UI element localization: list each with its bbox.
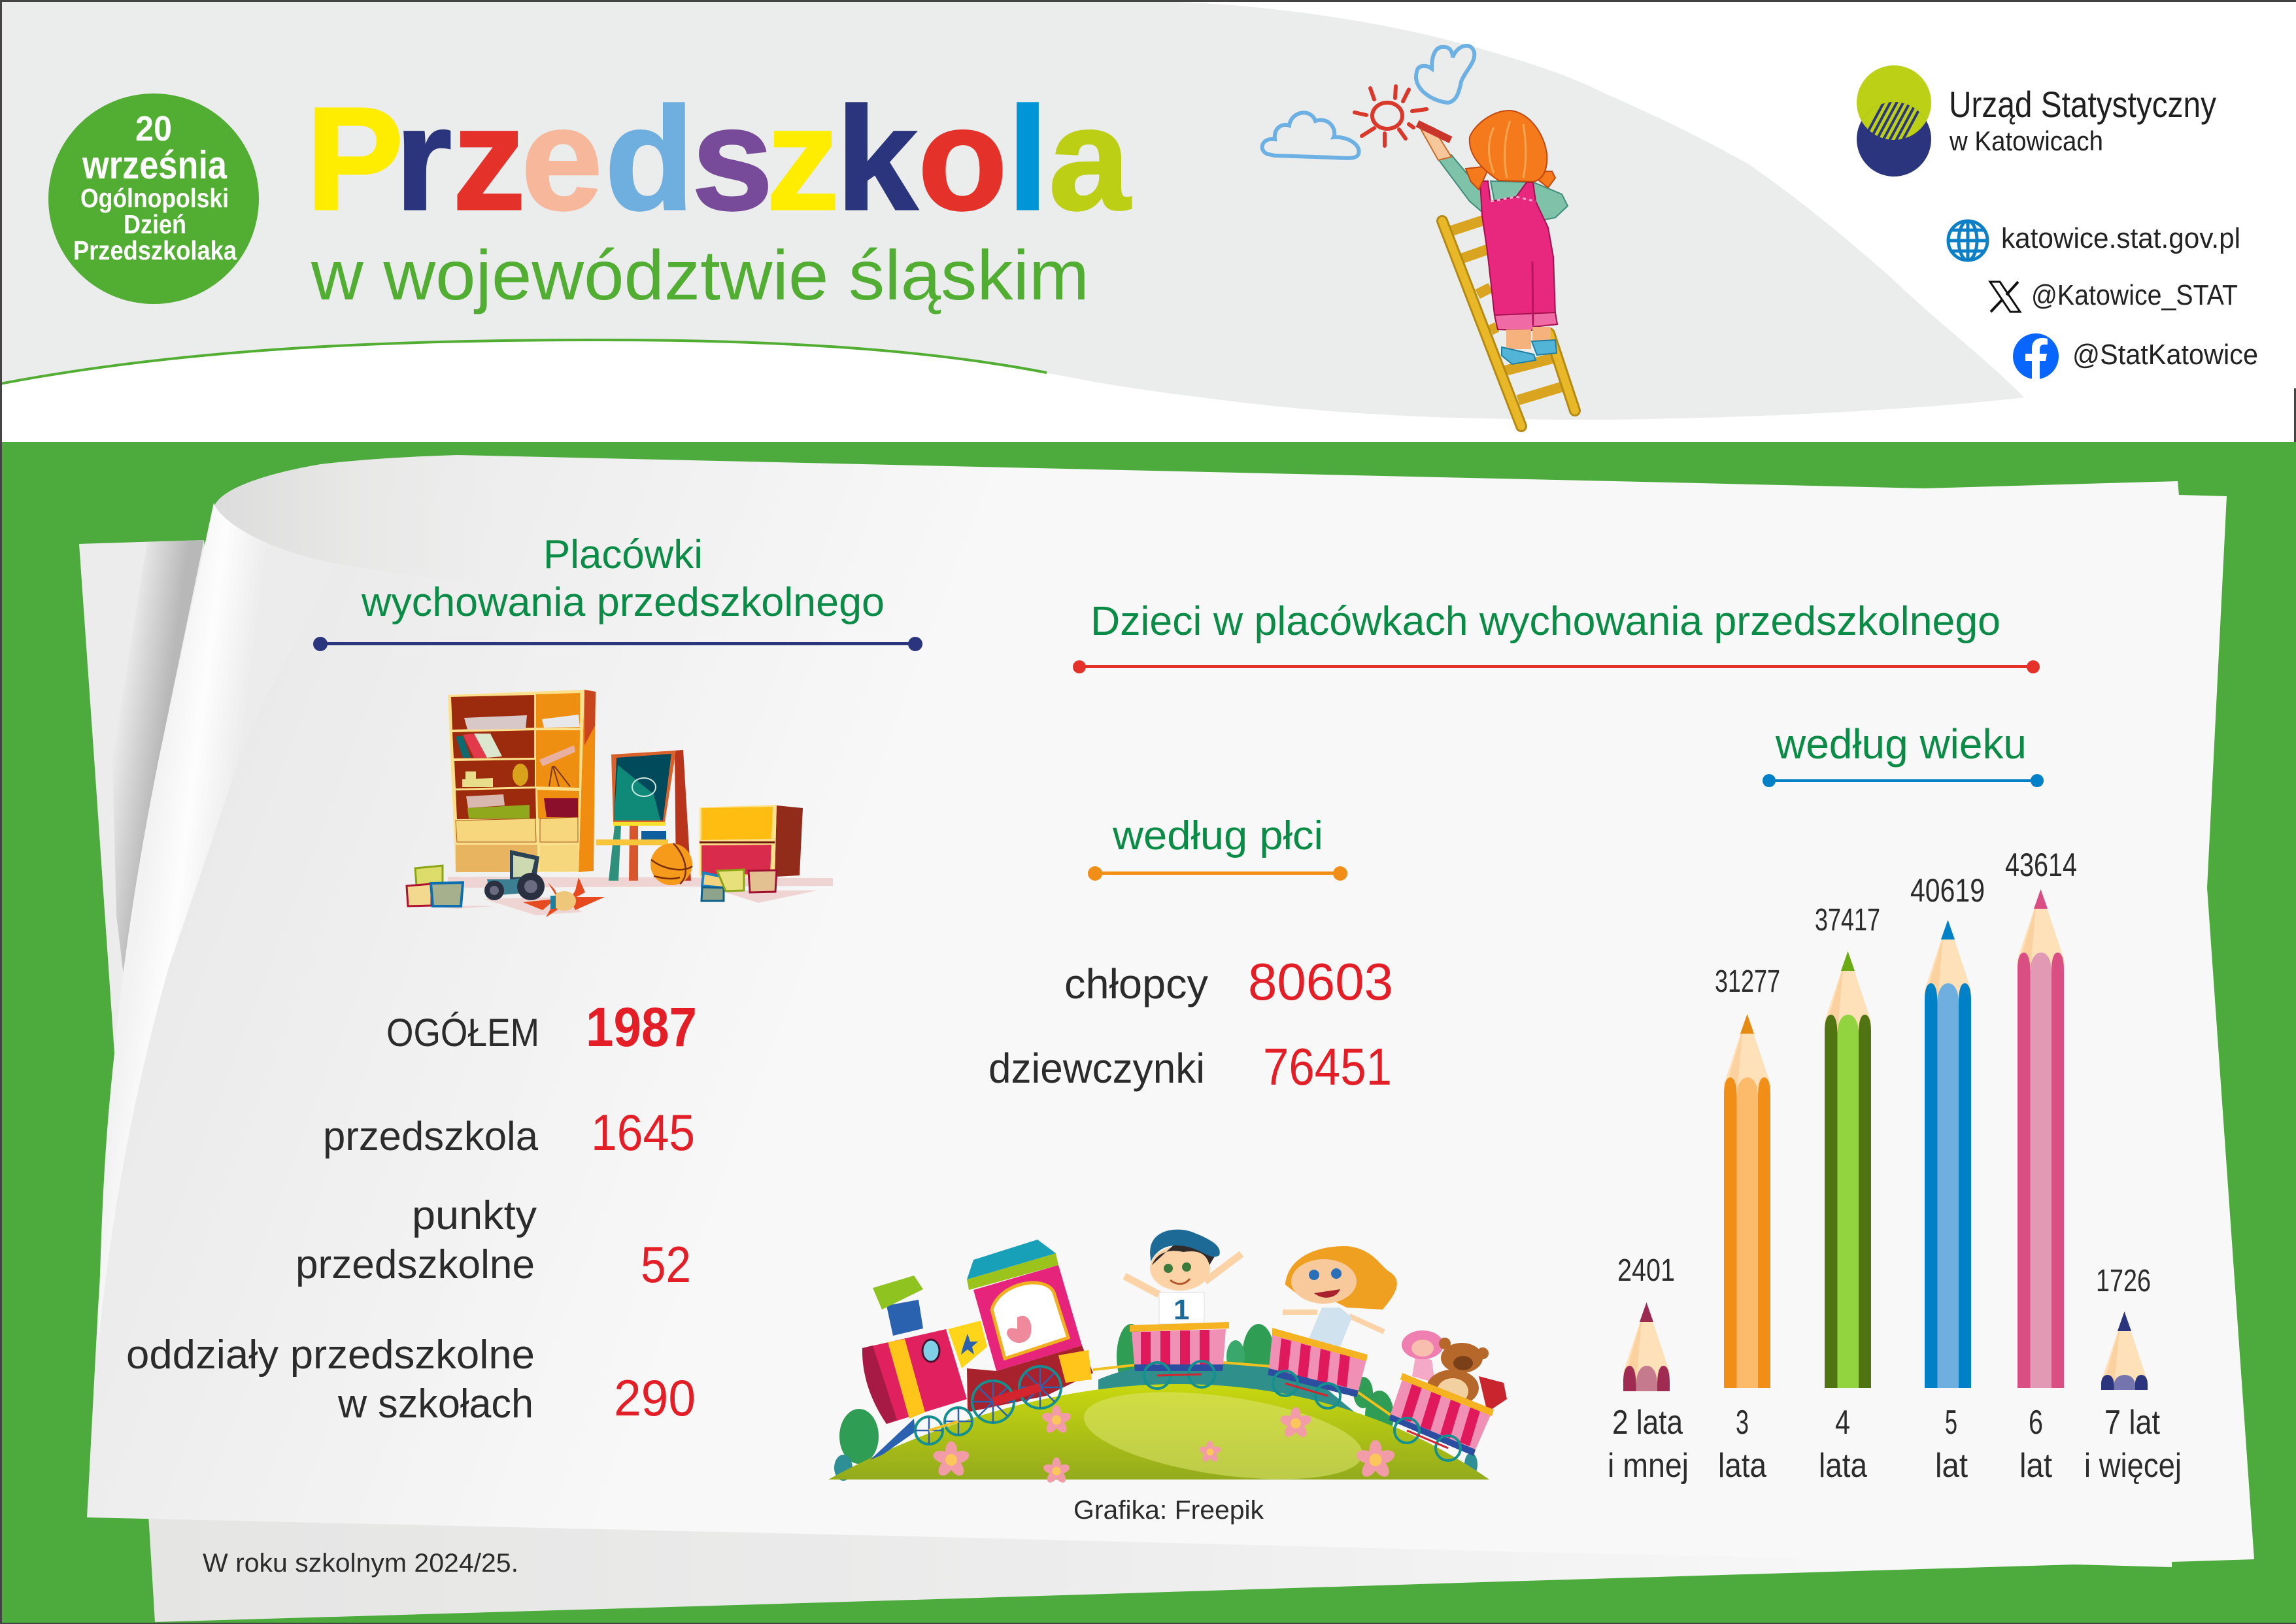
green background	[0, 442, 2296, 1624]
floor shadows	[406, 877, 833, 915]
row: OGÓŁEM: 1987	[586, 996, 697, 1058]
pencil: 4 lata: 4	[1835, 1404, 1850, 1442]
curl face	[98, 503, 335, 1347]
title: Przedszkola: k	[836, 77, 918, 241]
logo: Urząd Statystyczny	[1857, 65, 2216, 177]
row: oddziały przedszkolne w szkołach: oddziały przedszkolne	[126, 1332, 535, 1378]
badge: 20 września Ogólnopolski Dzień Przedszkolaka: Ogólnopolski	[80, 183, 229, 213]
hair	[1466, 110, 1555, 190]
header background	[0, 0, 2296, 442]
divider: blue	[1763, 774, 2044, 787]
overalls	[1480, 181, 1557, 330]
title: Przedszkola: l	[1007, 77, 1048, 241]
pencil: 3 lata	[1715, 964, 1780, 1485]
row: punkty przedszkolne: punkty	[412, 1193, 537, 1238]
credit: Grafika Freepik: Grafika: Freepik	[1073, 1496, 1264, 1525]
drawers	[700, 805, 803, 877]
panel: gender numbers: chłopcy	[1064, 960, 1208, 1007]
heading: Dzieci w placówkach: Dzieci w placówkach wychowania przedszkolnego	[1090, 599, 2001, 644]
badge: 20 września Ogólnopolski Dzień Przedszkolaka: września	[82, 143, 228, 187]
contact: X: @Katowice_STAT	[2031, 279, 2238, 311]
main sheet	[87, 455, 2254, 1567]
title: Przedszkola: P	[306, 77, 403, 241]
heading: według wieku: według wieku	[1775, 720, 2027, 768]
easel	[596, 750, 691, 881]
badge: 20 września Ogólnopolski Dzień Przedszkolaka: 20	[135, 109, 172, 148]
pencil: 4 lata: 37417	[1815, 903, 1880, 938]
ball	[650, 843, 692, 885]
illustration: girl drawing on a ladder	[1262, 46, 1575, 426]
illustration: kindergarten room toys	[406, 690, 833, 917]
doll, teddy bear and toy car	[1402, 1330, 1507, 1412]
pencil: 2 lata i mnej: 2 lata	[1612, 1404, 1683, 1442]
couplings	[1093, 1362, 1391, 1415]
contact: website	[1948, 221, 2240, 260]
logo: Urząd Statystyczny: w Katowicach	[1949, 126, 2103, 156]
logo: Urząd Statystyczny: Urząd Statystyczny	[1949, 84, 2216, 125]
legs and shoes	[1502, 327, 1557, 364]
title: Przedszkola: e	[521, 77, 603, 241]
pencil: 3 lata: 3	[1736, 1404, 1749, 1442]
pencil: 5 lat: 40619	[1910, 872, 1985, 909]
shirt and arm	[1437, 155, 1568, 220]
pencil: 5 lat	[1910, 872, 1985, 1485]
second car	[1268, 1328, 1368, 1408]
pencil chart by age	[1608, 847, 2182, 1485]
row: punkty przedszkolne	[295, 1193, 691, 1293]
pencil: 5 lat: lat	[1935, 1447, 1968, 1485]
title: Przedszkola: a	[1049, 77, 1131, 241]
heading: według płci: według płci	[1112, 813, 1323, 858]
row: przedszkola: przedszkola	[323, 1114, 539, 1159]
pencil: 5 lat: 5	[1945, 1404, 1957, 1442]
title: Przedszkola: s	[692, 77, 773, 241]
boy in first car: 1	[1173, 1294, 1189, 1326]
pencil: 7 lat i więcej: 7 lat	[2104, 1404, 2160, 1442]
curl inside	[213, 456, 497, 588]
doll toy	[523, 877, 605, 917]
pencil: 3 lata: 31277	[1715, 964, 1780, 999]
row: OGÓŁEM: OGÓŁEM	[386, 1011, 539, 1055]
row: oddziały przedszkolne w szkołach	[126, 1332, 696, 1427]
icon: X logo	[1990, 282, 2020, 312]
curl shadow	[112, 540, 204, 981]
girl in second car	[1283, 1246, 1397, 1347]
icon: globe	[1948, 221, 1987, 260]
tractor	[484, 850, 545, 900]
panel: gender numbers: dziewczynki	[988, 1045, 1205, 1092]
paper sheets	[79, 455, 2254, 1622]
blocks right	[701, 870, 777, 901]
contact: website: katowice.stat.gov.pl	[2001, 222, 2240, 254]
blocks left	[407, 866, 463, 906]
pencil: 6 lat: 43614	[2005, 847, 2077, 883]
row: przedszkola: 1645	[591, 1104, 695, 1161]
pencil: 6 lat: lat	[2019, 1447, 2053, 1485]
pencil: 7 lat i więcej	[2084, 1264, 2182, 1485]
panel: facility statistics	[126, 996, 697, 1427]
pencil: 4 lata: lata	[1819, 1447, 1867, 1485]
row: OGÓŁEM	[386, 996, 697, 1058]
divider: orange	[1088, 866, 1347, 881]
locomotive	[862, 1240, 1093, 1460]
subtitle: w województwie śląskim	[311, 235, 1089, 314]
icon: Facebook	[2013, 333, 2059, 379]
badge: 20 września Ogólnopolski Dzień Przedszkolaka: Dzień	[124, 209, 186, 239]
ladder	[1442, 220, 1575, 426]
pencil: 7 lat i więcej: i więcej	[2084, 1447, 2182, 1485]
heading: Placówki wychowania przedszkolnego: wychowania przedszkolnego	[361, 580, 885, 625]
title: Przedszkola: o	[918, 77, 1007, 241]
third car	[1389, 1373, 1494, 1461]
pencil: 2 lata i mnej	[1608, 1253, 1689, 1485]
row: punkty przedszkolne: przedszkolne	[295, 1242, 535, 1287]
lower sheet	[148, 1504, 2074, 1622]
title: Przedszkola: r	[395, 77, 452, 241]
divider: red	[1073, 660, 2040, 673]
panel: gender numbers: 76451	[1263, 1038, 1392, 1096]
divider: navy	[313, 637, 922, 651]
hill	[828, 1378, 1489, 1494]
title: Przedszkola: z	[452, 77, 526, 241]
row: oddziały przedszkolne w szkołach: 290	[614, 1369, 696, 1427]
badge: 20 września Ogólnopolski Dzień Przedszkolaka	[48, 93, 259, 304]
pencil: 3 lata: lata	[1718, 1447, 1766, 1485]
footnote: W roku szkolnym 2024/25.	[203, 1549, 518, 1578]
heading: Placówki wychowania przedszkolnego	[361, 532, 885, 625]
badge: 20 września Ogólnopolski Dzień Przedszkolaka: Przedszkolaka	[73, 235, 237, 265]
title: Przedszkola: z	[766, 77, 839, 241]
bushes	[834, 1324, 1477, 1481]
contact: Facebook: @StatKatowice	[2072, 339, 2258, 371]
pencil: 2 lata i mnej: i mnej	[1608, 1447, 1689, 1485]
pencil: 6 lat: 6	[2029, 1404, 2043, 1442]
first car	[1130, 1322, 1229, 1389]
row: przedszkola	[323, 1104, 695, 1161]
boy in first car	[1124, 1230, 1241, 1326]
heading: Placówki wychowania przedszkolnego: Placówki	[543, 532, 703, 577]
arm and crayon	[1421, 127, 1451, 160]
icon: clouds and sun	[1262, 46, 1474, 158]
contact: Facebook	[2013, 333, 2258, 379]
back sheet	[79, 540, 216, 1053]
title: Przedszkola: d	[605, 77, 694, 241]
panel: gender numbers: 80603	[1248, 953, 1393, 1011]
panel: gender numbers	[988, 953, 1393, 1096]
bookcase	[448, 690, 596, 872]
row: punkty przedszkolne: 52	[641, 1236, 691, 1293]
pencil: 4 lata	[1815, 903, 1880, 1485]
pencil: 2 lata i mnej: 2401	[1617, 1253, 1675, 1288]
illustration: train with children	[828, 1230, 1507, 1494]
pencil: 7 lat i więcej: 1726	[2096, 1264, 2151, 1298]
pencil: 6 lat	[2005, 847, 2077, 1485]
row: oddziały przedszkolne w szkołach: w szkołach	[337, 1381, 533, 1427]
